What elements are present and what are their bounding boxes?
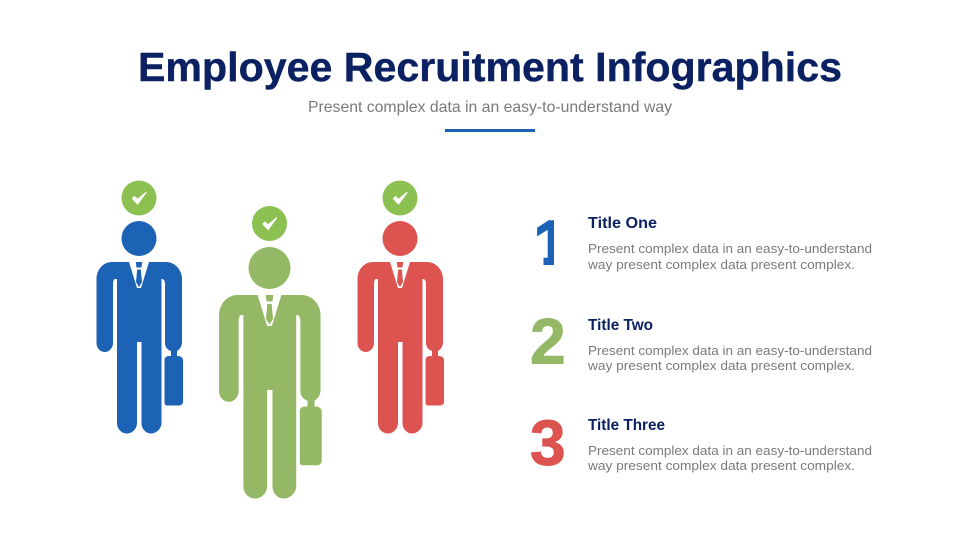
figure: blue employee: [96, 180, 183, 434]
item two description: way present complex data present complex.: [587, 358, 855, 373]
tie: [136, 262, 142, 287]
item two: [530, 306, 872, 378]
subtitle: Present complex data in an easy-to-understand way: [308, 99, 672, 116]
figure: red employee: [358, 180, 444, 434]
title underline: [445, 129, 535, 132]
suit body: [358, 262, 444, 434]
head: [248, 247, 290, 289]
head: [122, 221, 156, 256]
item one description: Present complex data in an easy-to-understand: [588, 241, 872, 256]
item three heading: Title Three: [588, 417, 665, 434]
suit body: [219, 295, 322, 499]
number 2: 2: [530, 306, 566, 378]
tie: [397, 262, 403, 287]
item two description: Present complex data in an easy-to-understand: [588, 343, 872, 358]
item three description: way present complex data present complex.: [587, 458, 855, 473]
item one description: [587, 241, 872, 272]
item two description: [587, 343, 872, 373]
item one: [537, 216, 872, 272]
check badge: [382, 180, 418, 216]
check badge: [122, 180, 156, 216]
collar: [129, 262, 149, 288]
collar: [258, 295, 281, 326]
item two heading: Title Two: [588, 317, 653, 334]
suit body: [96, 262, 183, 434]
item one heading: Title One: [588, 215, 657, 232]
item three: [530, 407, 872, 479]
number 1: 1: [534, 207, 569, 279]
head: [382, 221, 418, 256]
item three description: Present complex data in an easy-to-understand: [588, 443, 872, 458]
title: Employee Recruitment Infographics: [138, 44, 842, 90]
item three description: [587, 443, 872, 473]
tie: [266, 295, 273, 325]
collar: [390, 262, 410, 288]
item one description: way present complex data present complex.: [587, 257, 855, 272]
check badge: [252, 206, 287, 241]
figure: green employee: [219, 206, 322, 499]
number 3: 3: [530, 407, 566, 479]
